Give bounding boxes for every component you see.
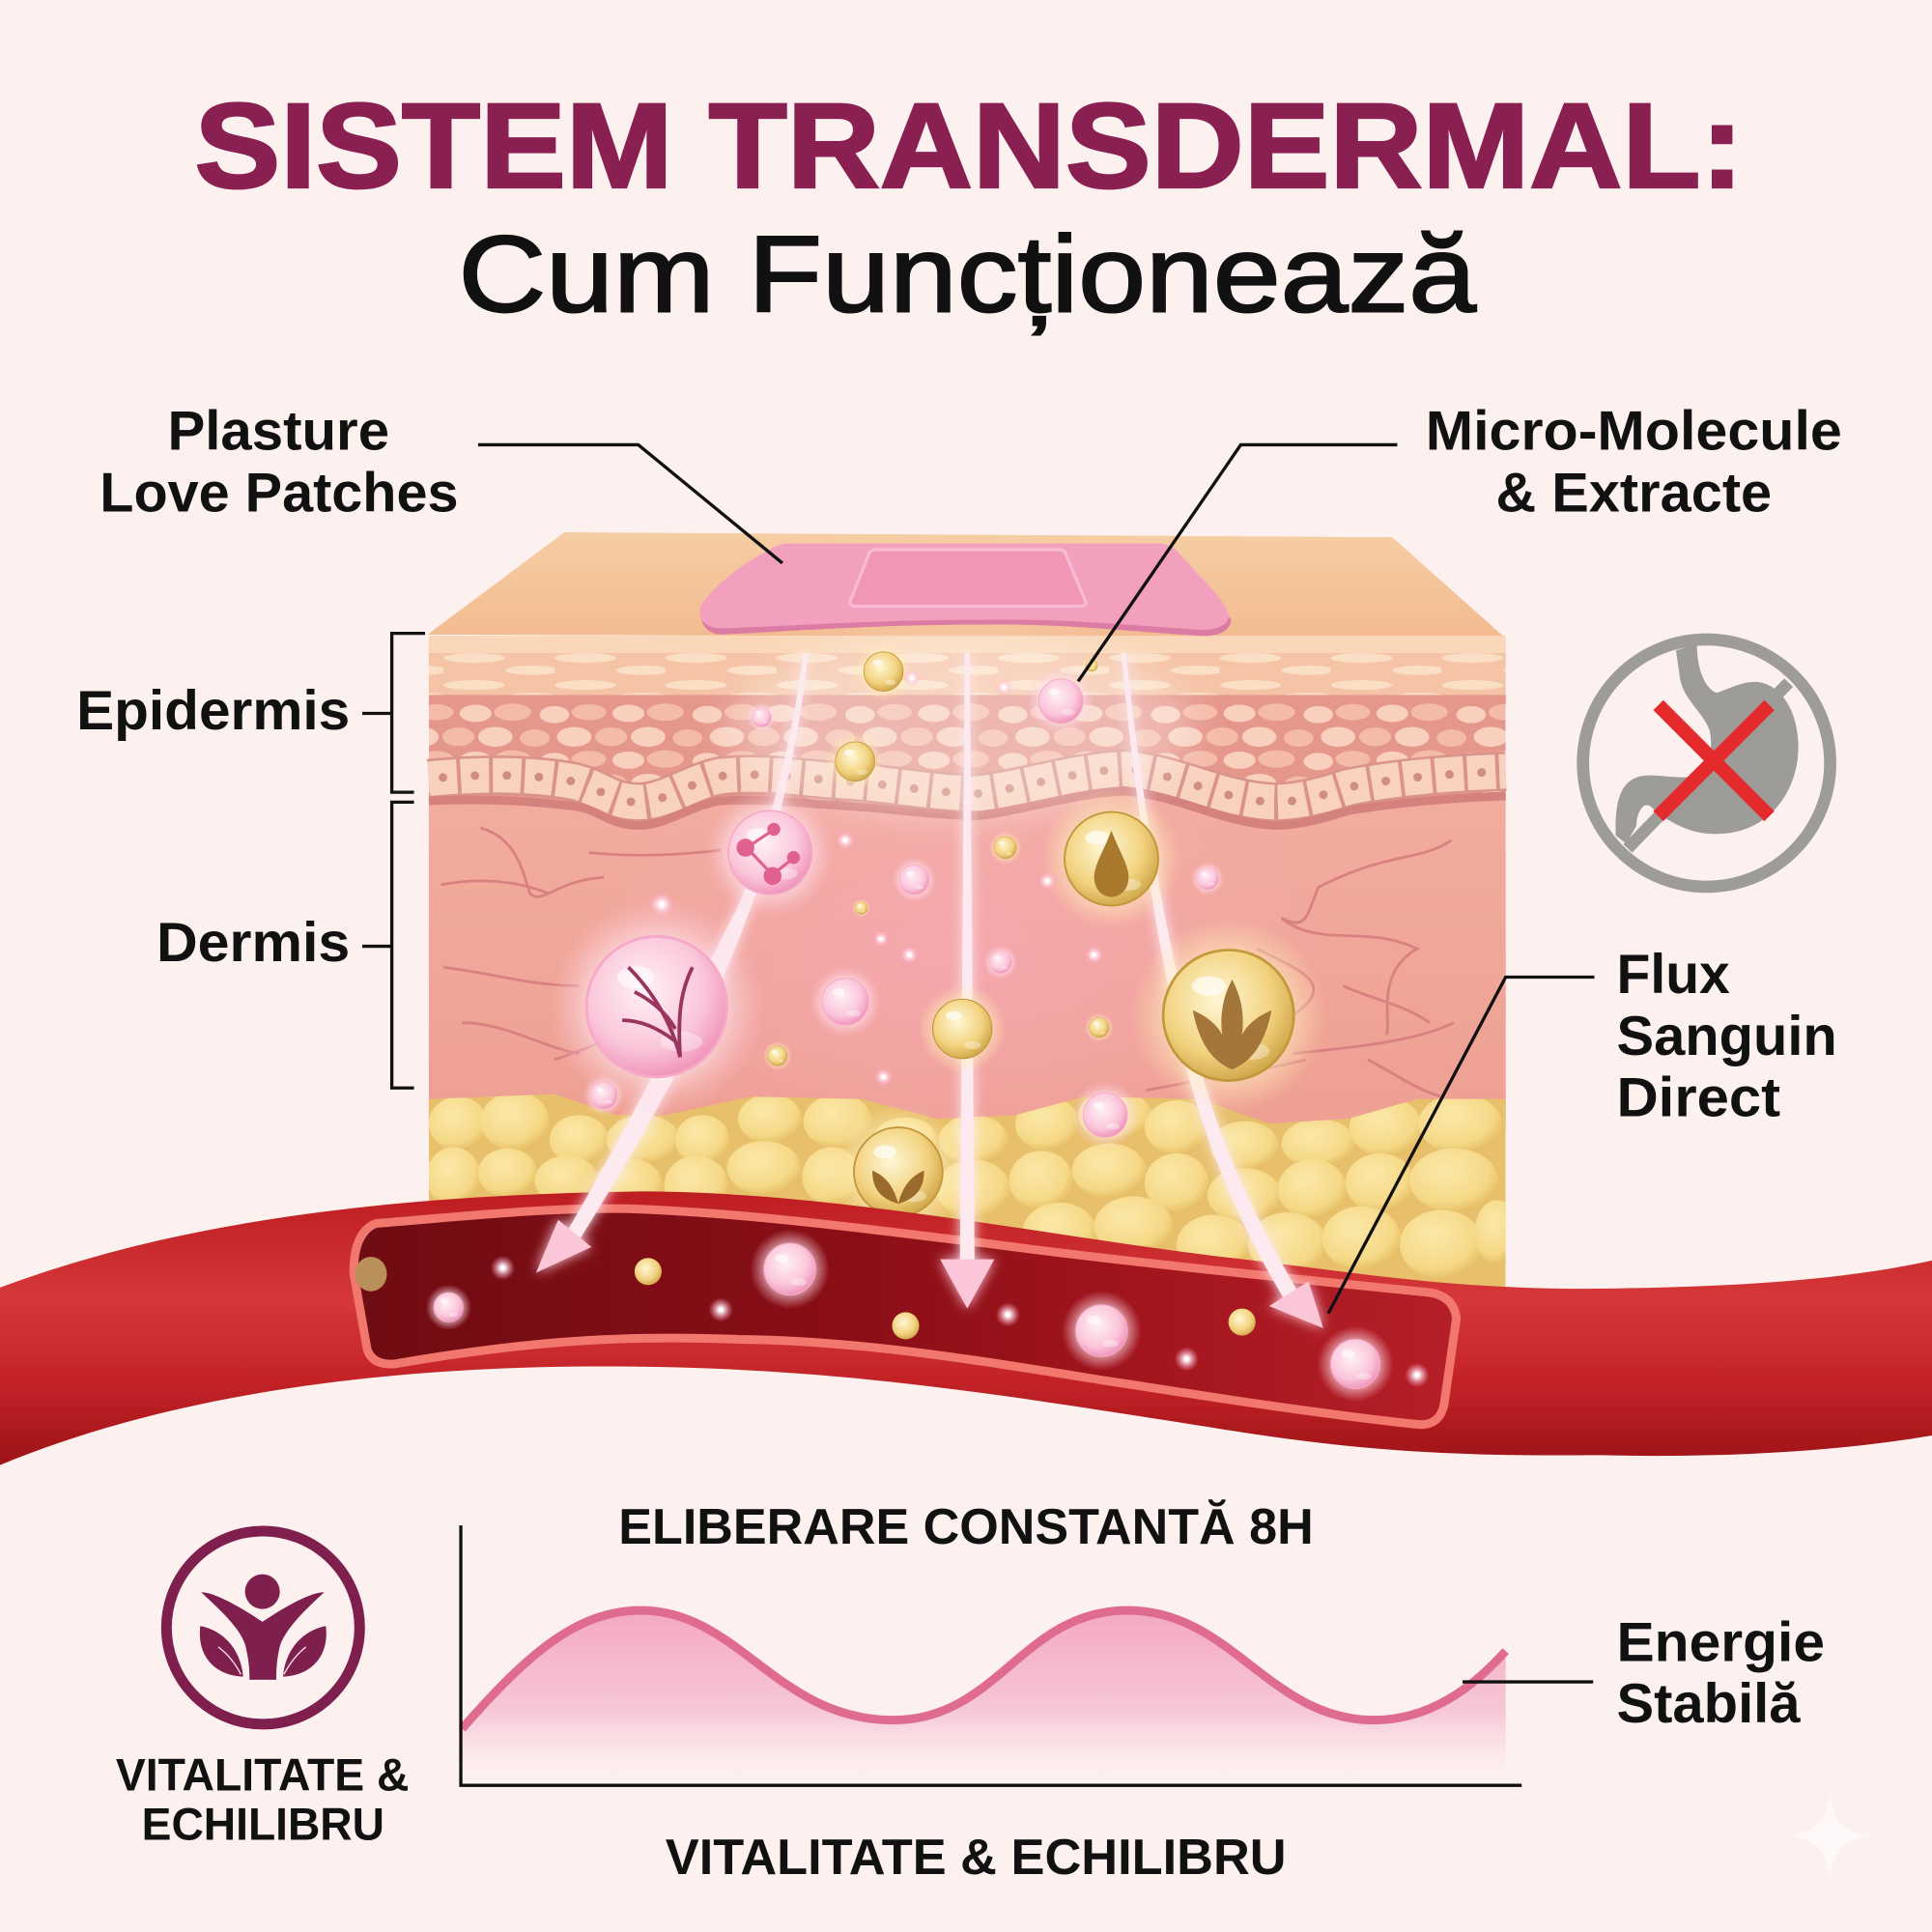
dermis layer (429, 788, 1506, 1133)
callout: stable energy (1463, 1611, 1825, 1735)
title line 2: Cum Funcționează (458, 213, 1477, 335)
callout: blood flow: Flux (1616, 944, 1730, 1006)
callout: micro-molecules (1078, 401, 1842, 681)
corneum layer (429, 640, 1506, 707)
callout: dermis (156, 802, 414, 1088)
callout: epidermis: Epidermis (76, 680, 350, 742)
icon: stomach crossed out (1583, 639, 1831, 887)
red cross (1659, 705, 1770, 816)
chart x label: VITALITATE & ECHILIBRU (666, 1830, 1287, 1886)
basal cell nuclei (429, 769, 1506, 802)
chart: constant 8h release (461, 1499, 1521, 1886)
patch lower lip (701, 591, 1231, 636)
arrow: right (1122, 653, 1323, 1328)
callout: patch (99, 401, 782, 563)
callout: stable energy: Energie (1616, 1611, 1825, 1673)
callout: blood flow: Sanguin (1616, 1006, 1837, 1067)
blood vessel (0, 1191, 1932, 1465)
epidermis cells (429, 703, 1505, 804)
callout: micro-molecules: Micro-Molecule (1426, 401, 1842, 463)
vitality label: VITALITATE & (116, 1749, 409, 1801)
gold oil bubble (1041, 788, 1181, 929)
callout: blood flow (1328, 944, 1837, 1314)
pink plant bubble (548, 897, 766, 1116)
small particles (582, 642, 1225, 1150)
patch body (699, 543, 1229, 630)
callouts (76, 401, 1842, 1314)
release curve (462, 1610, 1506, 1729)
title line 1: SISTEM TRANSDERMAL: (195, 79, 1744, 213)
vessel particles (355, 1229, 1430, 1403)
pink molecule bubble (705, 787, 835, 918)
panel: skin cross-section (426, 532, 1520, 1293)
callout: micro-molecules: & Extracte (1495, 462, 1772, 524)
fat layer (426, 1084, 1520, 1293)
sparkle watermark (1786, 1793, 1873, 1879)
skin top surface (428, 532, 1506, 639)
icon: leaf (872, 1171, 924, 1204)
callout: patch: Love Patches (99, 462, 458, 524)
vitality label: ECHILIBRU (142, 1799, 384, 1850)
vessel outer wall (0, 1191, 1932, 1465)
dermis capillaries (441, 828, 1454, 1096)
patch (699, 543, 1231, 636)
icon: herb (622, 967, 693, 1057)
gold leaf bubble (1130, 918, 1326, 1113)
callout: dermis: Dermis (156, 912, 350, 974)
dermal junction (429, 791, 1506, 826)
callout: epidermis (76, 634, 425, 792)
icon: vitality person with leaves (166, 1531, 359, 1724)
axes (461, 1525, 1521, 1785)
callout: blood flow: Direct (1616, 1067, 1780, 1129)
callout: stable energy: Stabilă (1616, 1673, 1802, 1735)
chart heading: ELIBERARE CONSTANTĂ 8H (618, 1499, 1314, 1555)
area under curve (462, 1610, 1506, 1780)
icon: drop (1094, 831, 1128, 897)
central light glow (727, 635, 1195, 819)
basal cell borders (429, 769, 1506, 802)
callout: patch: Plasture (167, 401, 389, 463)
vitality label (116, 1749, 409, 1850)
arrows: absorption paths (536, 653, 1323, 1328)
arrow: left (536, 653, 809, 1273)
active molecules (548, 642, 1326, 1150)
arrow: centre (940, 653, 994, 1309)
patch reservoir (850, 550, 1086, 607)
ball behind vessel: gold leaf bottom (832, 1105, 965, 1238)
icon: molecule (738, 824, 799, 884)
icon: aloe leaves (1193, 980, 1271, 1069)
title (195, 79, 1744, 335)
vessel lumen (354, 1208, 1457, 1425)
basal cell row (429, 769, 1506, 802)
